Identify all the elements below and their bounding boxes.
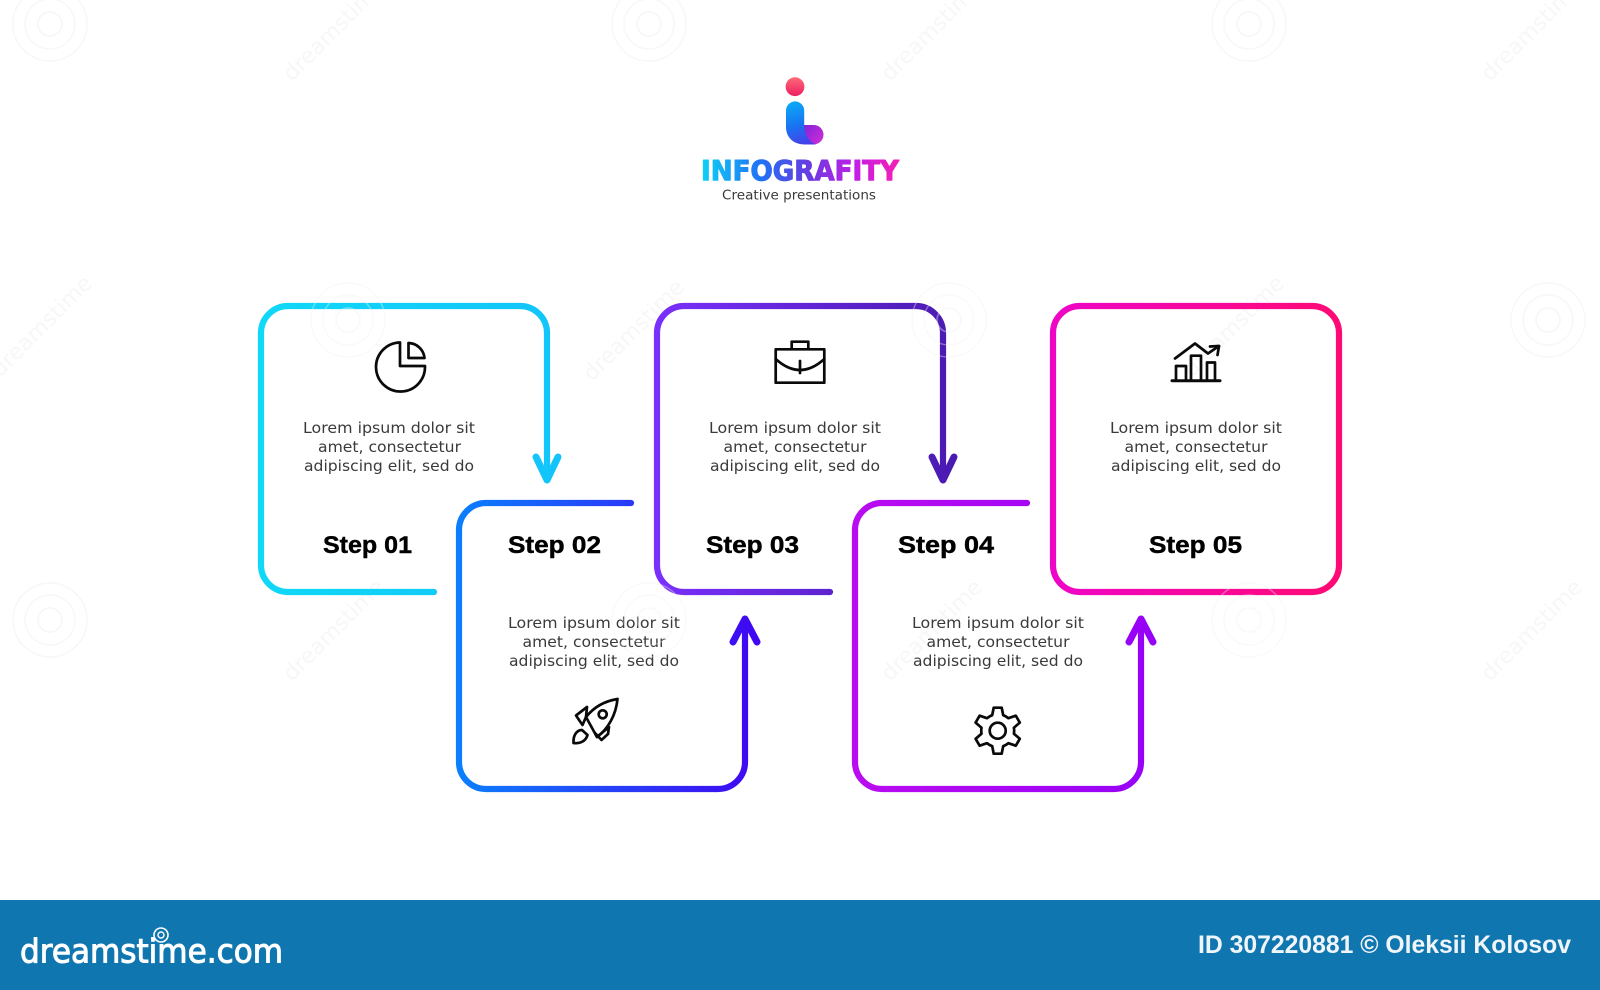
step 04 text: adipiscing elit, sed do <box>913 652 1083 670</box>
step 01 outline with arrow <box>261 306 558 592</box>
panel: step 03 <box>657 306 954 592</box>
step 02 text: amet, consectetur <box>522 633 666 651</box>
step 02 heading: Step 02 <box>508 532 601 559</box>
panel: step 05 <box>1053 306 1339 592</box>
panel: step 04 <box>855 503 1153 789</box>
step 01 text: amet, consectetur <box>318 438 462 456</box>
watermark pattern: dreamstime <box>877 575 988 686</box>
step 03 heading: Step 03 <box>706 532 799 559</box>
footer credit: ID 307220881 © Oleksii Kolosov <box>1198 931 1571 959</box>
step 03 text: amet, consectetur <box>724 438 867 456</box>
step 05 text: adipiscing elit, sed do <box>1111 457 1281 475</box>
logo mark <box>786 77 823 144</box>
step 05 outline <box>1053 306 1339 592</box>
step 03 outline with arrow <box>657 306 954 592</box>
watermark pattern: dreamstime <box>579 275 690 386</box>
logo tagline: Creative presentations <box>722 188 876 204</box>
step 02 text: Lorem ipsum dolor sit <box>508 614 680 632</box>
icon: pie chart <box>376 342 425 391</box>
step 01 text: adipiscing elit, sed do <box>304 457 474 475</box>
icon: briefcase <box>776 342 824 383</box>
panel: step 02 <box>459 503 757 789</box>
icon: growth chart <box>1172 344 1220 381</box>
step 04 text: Lorem ipsum dolor sit <box>912 614 1084 632</box>
step 05 text: Lorem ipsum dolor sit <box>1110 419 1282 437</box>
step 05 text <box>1110 419 1282 475</box>
step 01 text <box>303 419 475 475</box>
step 04 text: amet, consectetur <box>926 633 1070 651</box>
footer brand: dreamstime.com <box>20 932 283 970</box>
footer bar <box>0 900 1600 990</box>
step 03 text <box>709 419 881 475</box>
step 04 heading: Step 04 <box>898 532 994 559</box>
logo wordmark: INFOGRAFITY <box>701 155 900 187</box>
step 02 text: adipiscing elit, sed do <box>509 652 679 670</box>
watermark overlay <box>311 283 1286 657</box>
watermark pattern: dreamstime <box>1477 575 1588 686</box>
step 04 outline with arrow <box>855 503 1153 789</box>
icon: gear <box>976 708 1020 754</box>
step 03 text: adipiscing elit, sed do <box>710 457 880 475</box>
icon: rocket <box>573 699 618 743</box>
step 02 outline with arrow <box>459 503 757 789</box>
watermark pattern: dreamstime <box>279 575 390 686</box>
step 02 text <box>508 614 680 670</box>
step 05 heading: Step 05 <box>1149 532 1242 559</box>
watermark pattern <box>0 0 1588 686</box>
step 01 heading: Step 01 <box>323 532 412 559</box>
step 03 text: Lorem ipsum dolor sit <box>709 419 881 437</box>
step 01 text: Lorem ipsum dolor sit <box>303 419 475 437</box>
step 05 text: amet, consectetur <box>1124 438 1268 456</box>
logo <box>701 77 900 204</box>
step 04 text <box>912 614 1084 670</box>
watermark pattern: dreamstime <box>1179 271 1290 382</box>
panel: step 01 <box>261 306 558 592</box>
